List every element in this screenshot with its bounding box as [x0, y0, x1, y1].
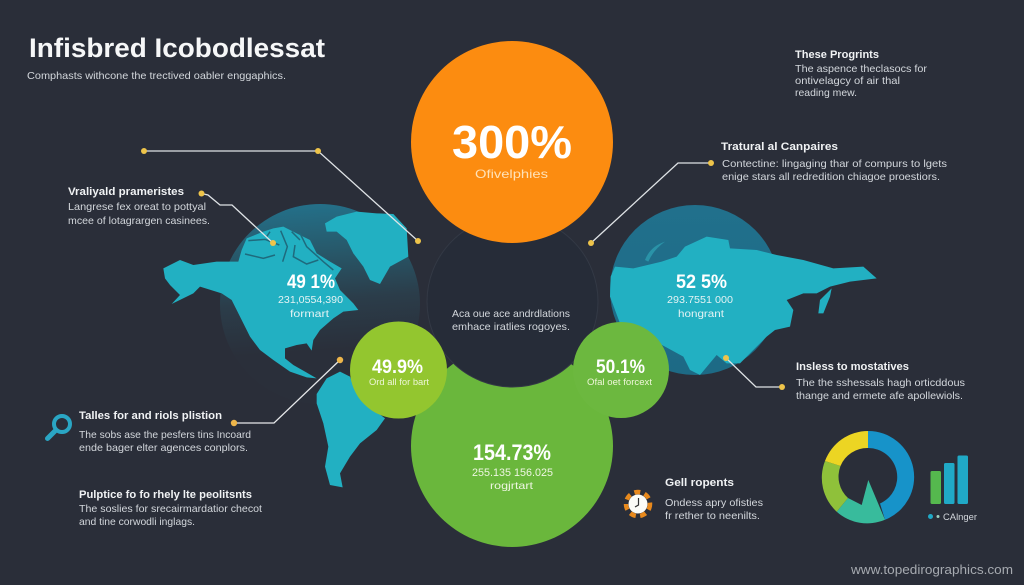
centre dark circle	[427, 216, 598, 387]
big green stat	[472, 440, 553, 492]
asia stat	[667, 272, 733, 320]
left small green circle	[350, 322, 447, 418]
left small green circle: 49.9%	[372, 357, 423, 378]
americas stat	[278, 272, 343, 320]
text block: parameters: Vraliyald prameristes	[68, 186, 184, 198]
big green stat: 255.135 156.025	[472, 467, 553, 479]
map: americas globe	[163, 204, 420, 487]
chart legend	[928, 512, 977, 523]
right small green circle: Ofal oet forcext	[587, 377, 653, 387]
americas stat: formart	[290, 309, 329, 320]
text block: talles	[79, 410, 251, 454]
text block: programs: The aspence theclasocs for	[795, 63, 928, 75]
chart legend: CAlnger	[943, 512, 977, 523]
text block: companies	[721, 141, 947, 183]
connector: parameters	[198, 190, 276, 246]
icon: magnifier	[48, 416, 70, 438]
bar chart	[930, 456, 968, 504]
asia stat: 293.7551 000	[667, 295, 733, 306]
orange stat: Ofivelphies	[475, 167, 548, 181]
title: Infisbred Icobodlessat	[29, 33, 325, 63]
subtitle: Comphasts withcone the trectived oabler enggaphics.	[27, 70, 286, 82]
text block: companies: enige stars all redredition chiagoe proestiors.	[722, 171, 940, 183]
text block: insless: thange and ermete afe apollewiols.	[796, 390, 963, 402]
orange stat: 300%	[452, 116, 572, 168]
big green stat: 154.73%	[473, 440, 551, 465]
text block: talles: Talles for and riols plistion	[79, 410, 222, 422]
text block: parameters: mcee of lotagrargen casinees.	[68, 215, 210, 227]
centre text	[452, 308, 570, 333]
text block: programs: reading mew.	[795, 87, 857, 99]
orange circle	[411, 41, 613, 243]
text block: companies: Tratural al Canpaires	[721, 141, 838, 153]
left small green circle: Ord all for bart	[369, 377, 430, 387]
text block: talles: ende bager elter agences conplors.	[79, 442, 248, 454]
asia stat: 52 5%	[676, 272, 727, 293]
big green stat: rogjrtart	[490, 480, 533, 492]
icon: clock	[626, 492, 650, 516]
text block: companies: Contectine: lingaging thar of compurs to lgets	[722, 158, 947, 170]
text block: parameters	[68, 186, 210, 227]
centre text: emhace iratlies rogoyes.	[452, 321, 570, 333]
text block: insless	[796, 361, 965, 402]
map: asia globe	[610, 205, 877, 375]
americas stat: 49 1%	[287, 272, 335, 293]
text block: programs: These Progrints	[795, 49, 879, 61]
text block: pulptice: Pulptice fo fo rhely lte peolitsnts	[79, 489, 252, 501]
text block: pulptice: The soslies for srecairmardatior checot	[79, 503, 262, 515]
text block: gell: Gell ropents	[665, 477, 734, 489]
text block: pulptice	[79, 489, 262, 528]
connector: upper right	[588, 160, 714, 246]
donut chart	[822, 431, 914, 523]
asia stat: hongrant	[678, 309, 724, 320]
website url: www.topedirographics.com	[850, 563, 1013, 577]
text block: gell: fr rether to neenilts.	[665, 510, 760, 522]
text block: insless: The the sshessals hagh orticddous	[796, 377, 965, 389]
text block: gell	[665, 477, 763, 522]
connector: lower right	[723, 355, 785, 390]
big green circle	[411, 345, 613, 547]
right small green circle: 50.1%	[596, 357, 645, 378]
text block: talles: The sobs ase the pesfers tins Incoard	[79, 429, 251, 441]
connector: top line	[141, 148, 421, 244]
right small green circle	[573, 322, 669, 418]
text block: programs: ontivelagcy of air thal	[795, 75, 900, 87]
text block: gell: Ondess apry ofisties	[665, 497, 763, 509]
text block: insless: Insless to mostatives	[796, 361, 909, 373]
text block: parameters: Langrese fex oreat to pottyal	[68, 201, 206, 213]
connector: lower left	[231, 357, 343, 426]
text block: programs	[795, 49, 928, 99]
text block: pulptice: and tine corwodli inglags.	[79, 516, 195, 528]
americas stat: 231,0554,390	[278, 295, 343, 306]
centre text: Aca oue ace andrdlations	[452, 308, 570, 320]
